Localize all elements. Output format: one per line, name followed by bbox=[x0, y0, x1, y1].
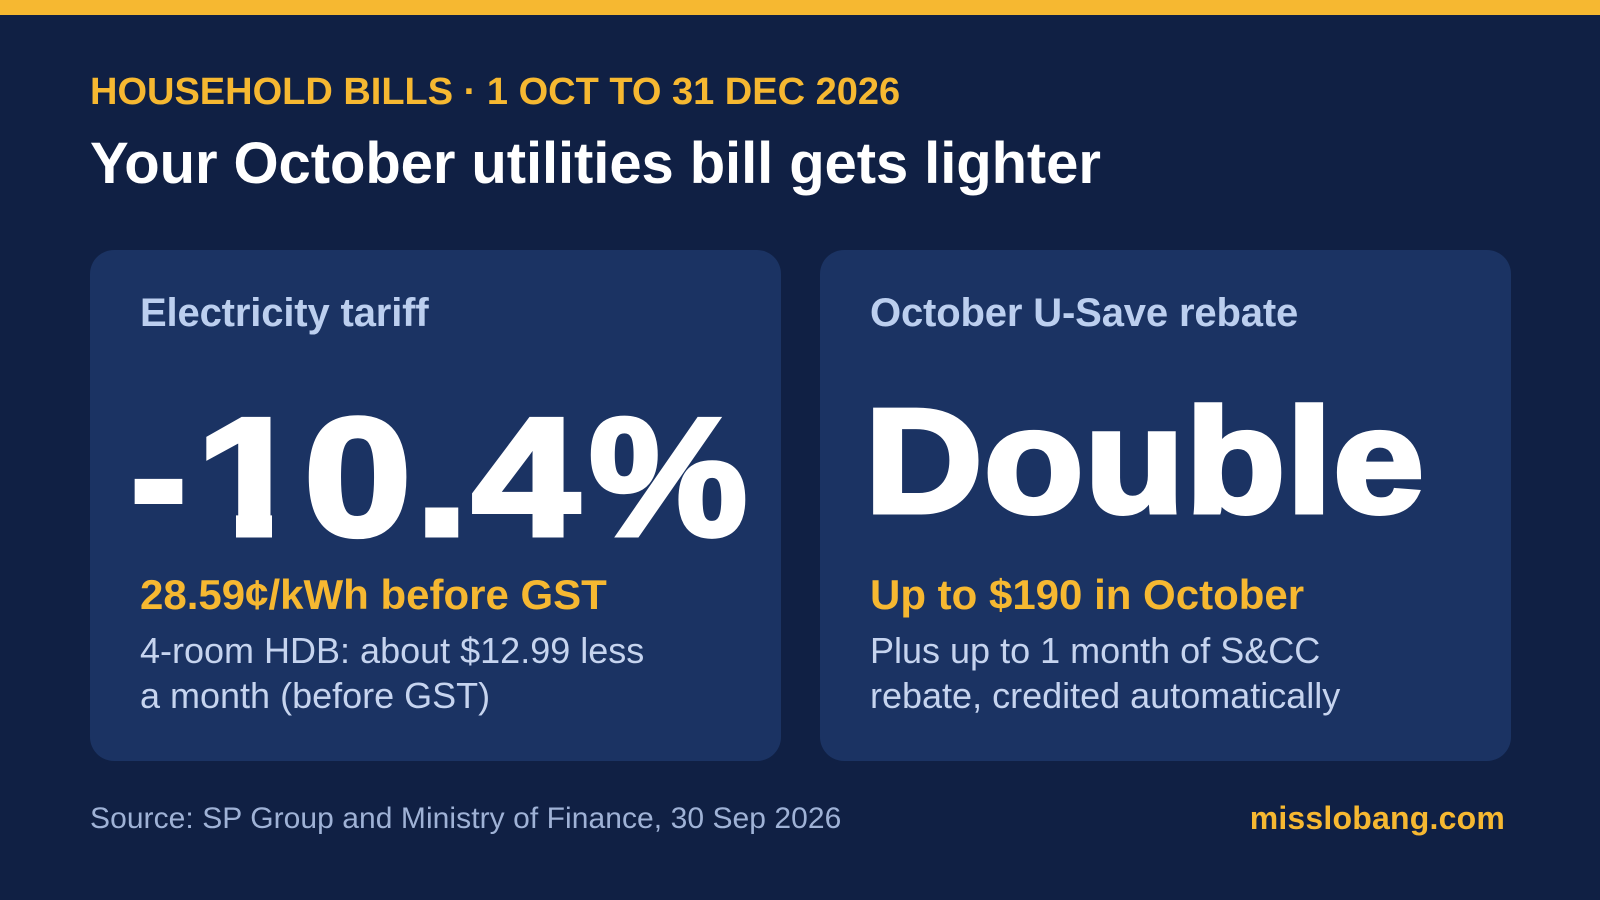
big number: 4 bbox=[472, 383, 579, 571]
big number: - bbox=[131, 383, 187, 571]
top accent bar bbox=[0, 0, 1600, 15]
detail text: rebate, credited automatically bbox=[870, 675, 1340, 716]
detail text: Plus up to 1 month of S&CC bbox=[870, 630, 1320, 671]
big number bbox=[131, 383, 747, 571]
title: Your October utilities bill gets lighter bbox=[90, 131, 1101, 196]
highlight line: Up to $190 in October bbox=[870, 571, 1304, 618]
source note: Source: SP Group and Ministry of Finance, 30 Sep 2026 bbox=[90, 802, 841, 835]
panel heading: Electricity tariff bbox=[140, 291, 429, 335]
big number: . bbox=[415, 383, 469, 571]
detail text: 4-room HDB: about $12.99 less bbox=[140, 630, 644, 671]
brand: misslobang.com bbox=[1250, 800, 1505, 836]
highlight line: 28.59¢/kWh before GST bbox=[140, 571, 607, 618]
panel: U-Save rebate bbox=[820, 250, 1511, 761]
detail text: a month (before GST) bbox=[140, 675, 490, 716]
panel heading: October U-Save rebate bbox=[870, 291, 1298, 335]
big number: 0 bbox=[304, 383, 411, 571]
detail text bbox=[870, 630, 1340, 716]
big number: % bbox=[589, 383, 747, 571]
panel: electricity tariff bbox=[90, 250, 781, 761]
detail text bbox=[140, 630, 644, 716]
big number: 1 bbox=[196, 383, 303, 571]
big word: Double bbox=[865, 379, 1425, 544]
eyebrow: HOUSEHOLD BILLS · 1 OCT TO 31 DEC 2026 bbox=[90, 71, 900, 113]
